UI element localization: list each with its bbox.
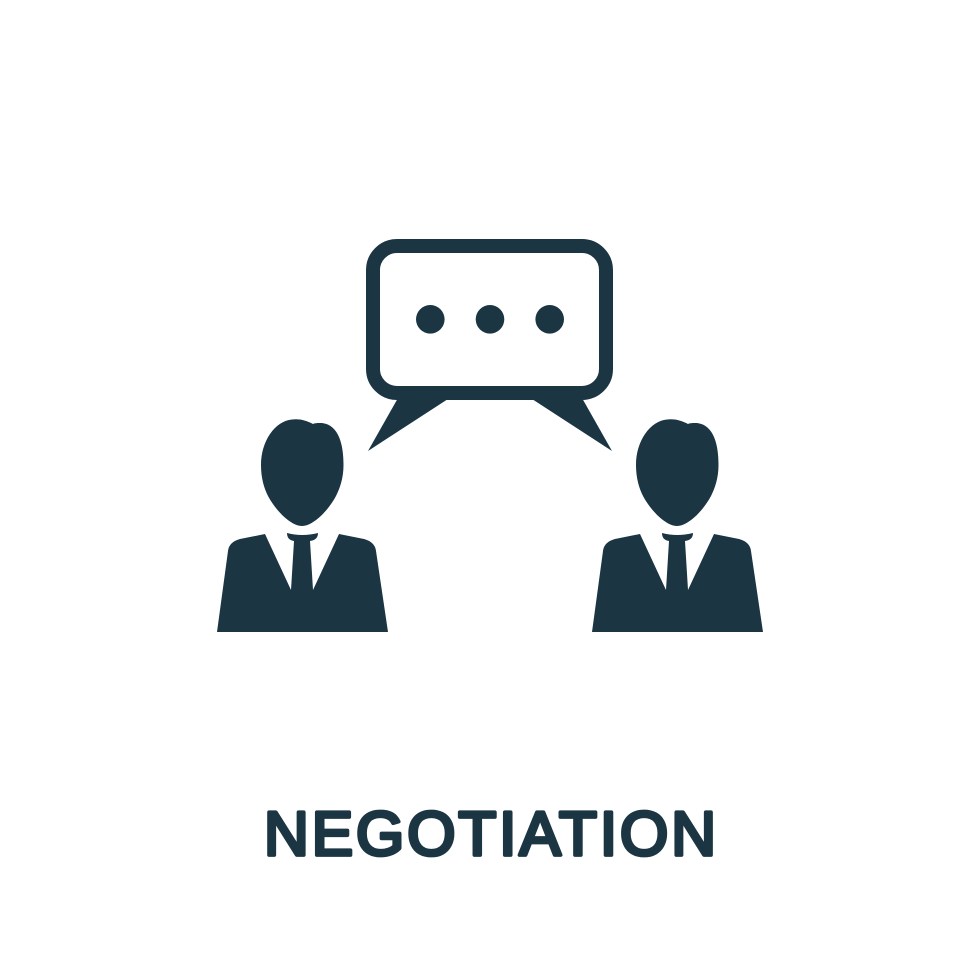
bubble left tail bbox=[368, 398, 448, 451]
icon: speech bubble bbox=[368, 246, 612, 451]
icon: left businessman bbox=[217, 419, 388, 632]
left head bbox=[261, 419, 344, 526]
ellipsis dots bbox=[416, 305, 564, 334]
left suit and tie bbox=[217, 533, 388, 632]
bubble frame bbox=[373, 246, 606, 393]
title: NEGOTIATION bbox=[264, 800, 716, 869]
right suit and tie bbox=[592, 533, 763, 632]
right head bbox=[636, 419, 718, 526]
icon: right businessman bbox=[592, 419, 763, 632]
bubble right tail bbox=[532, 398, 612, 451]
